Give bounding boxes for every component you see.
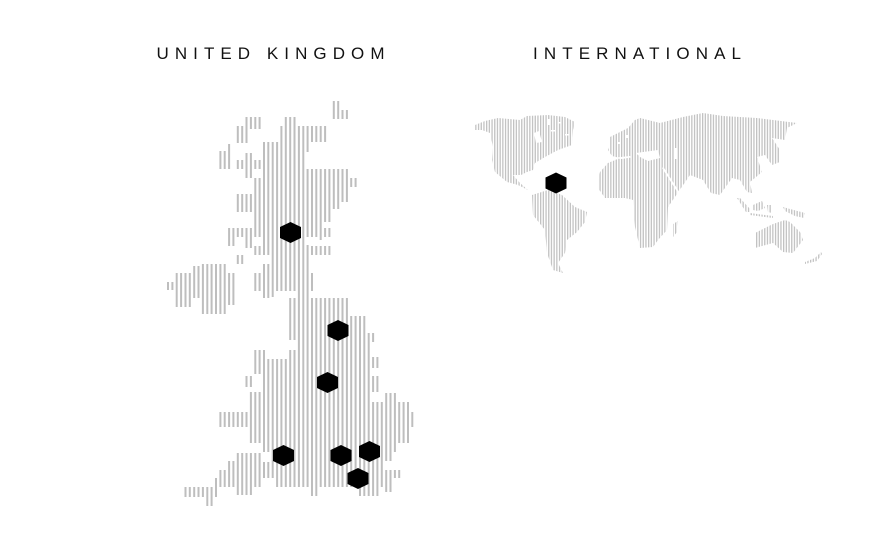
- location marker: international: [546, 172, 566, 194]
- heading: United Kingdom: UNITED KINGDOM: [156, 44, 384, 63]
- island: Java: [750, 213, 773, 218]
- location marker: Midlands: [317, 372, 338, 393]
- location marker: London: [359, 441, 380, 462]
- island: Sulawesi: [767, 205, 772, 213]
- location marker: Sussex: [348, 468, 368, 489]
- island: New Zealand: [805, 252, 822, 264]
- location marker: South Wales: [273, 445, 294, 466]
- island: Madagascar: [673, 221, 678, 237]
- heading: International: INTERNATIONAL: [533, 44, 741, 63]
- continent: North America: [475, 115, 575, 190]
- sea cut-outs: [534, 119, 680, 194]
- map: world striped silhouette: [475, 113, 822, 273]
- island: Borneo: [753, 201, 765, 211]
- location marker: Oxfordshire: [330, 445, 352, 466]
- island: Sumatra: [737, 198, 750, 212]
- continent: South America: [532, 190, 587, 273]
- continent: Eurasia and Africa: [598, 113, 797, 248]
- island: New Guinea: [783, 207, 805, 218]
- continent: Australia: [755, 220, 803, 253]
- location marker: Scotland: [280, 222, 301, 243]
- map: United Kingdom striped silhouette: [168, 101, 412, 506]
- location marker: northern England: [328, 320, 348, 341]
